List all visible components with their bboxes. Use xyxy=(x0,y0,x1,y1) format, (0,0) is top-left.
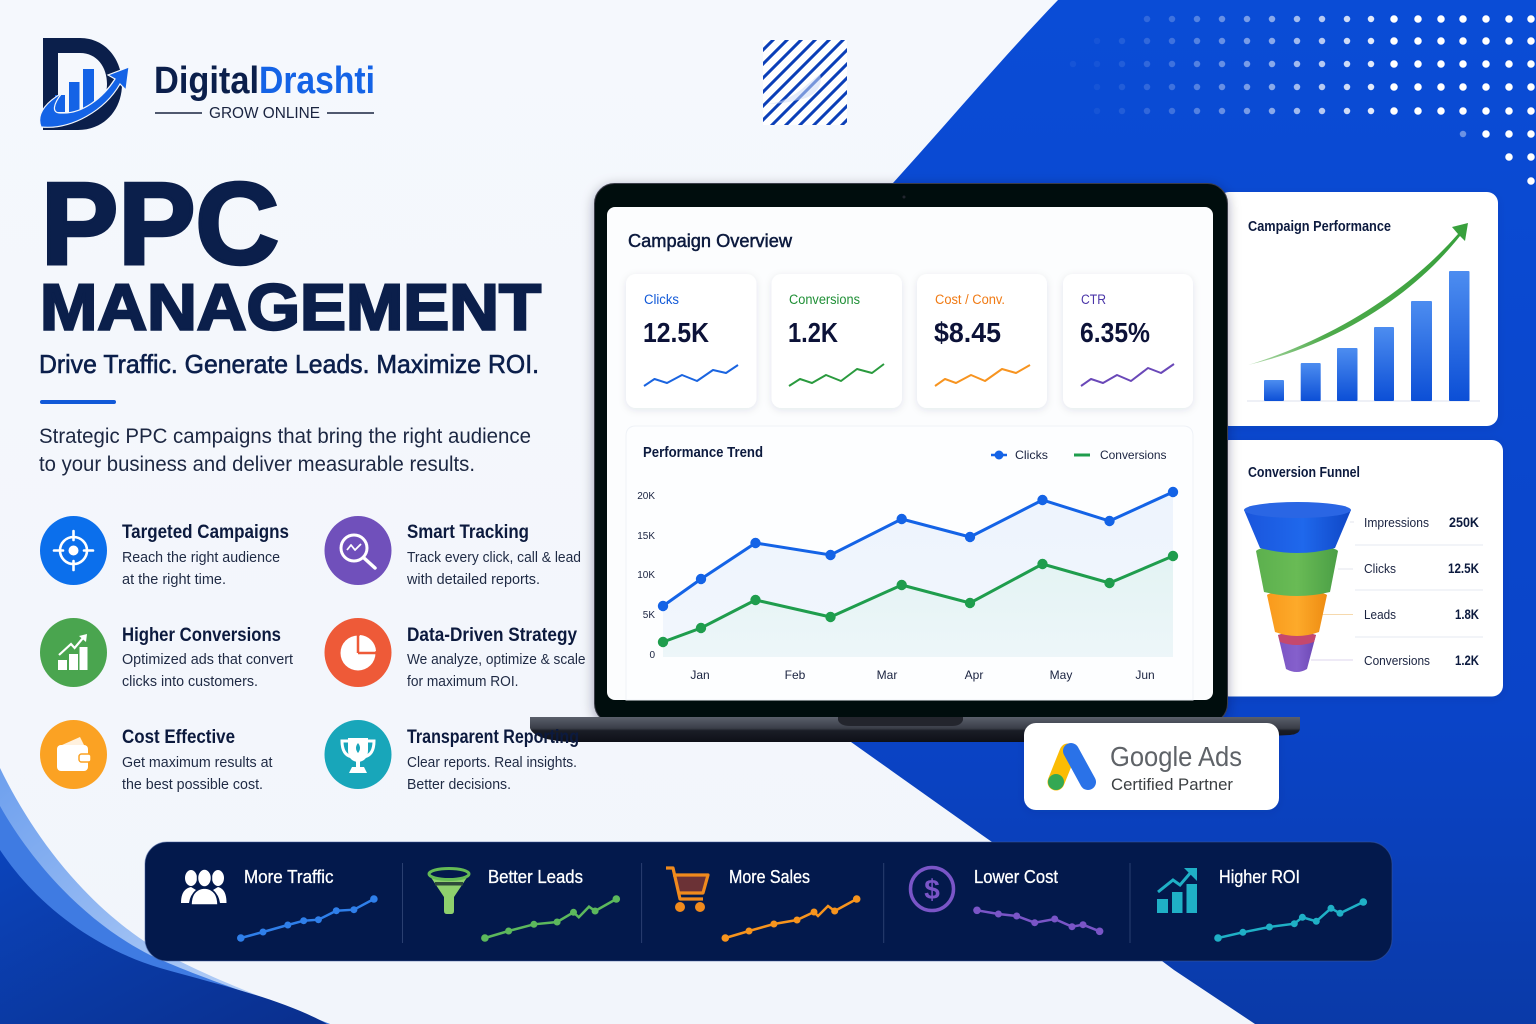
text block: Optimized ads that convert xyxy=(122,652,293,668)
text block xyxy=(122,727,272,793)
benefit: Higher ROI xyxy=(1157,867,1367,942)
feature: Cost Effective xyxy=(40,720,272,793)
KPI card: CTR xyxy=(1063,274,1193,408)
icon: people xyxy=(181,869,226,905)
benefit: Better Leads xyxy=(429,867,620,942)
text block: Transparent Reporting xyxy=(407,727,579,748)
sparkline xyxy=(722,895,860,942)
benefit: Lower Cost xyxy=(910,867,1103,935)
text block: We analyze, optimize & scale xyxy=(407,652,586,668)
funnel values: 250K xyxy=(1449,515,1479,530)
KPI card: Cost per Conversion xyxy=(917,274,1047,408)
growth arrow xyxy=(1248,223,1468,365)
logo mark xyxy=(40,38,129,130)
y axis labels: 5K xyxy=(643,610,655,621)
text block: Smart Tracking xyxy=(407,522,529,543)
text block: Higher Conversions xyxy=(122,625,281,646)
bar chart xyxy=(1247,271,1480,401)
benefit: More Sales: More Sales xyxy=(729,867,810,887)
text block xyxy=(407,727,579,793)
blue background shape right xyxy=(805,0,1536,1024)
icon: trophy xyxy=(324,720,392,789)
dot pattern top right xyxy=(1073,19,1531,181)
x axis labels: Jan xyxy=(690,668,710,682)
icon: wallet xyxy=(40,720,107,789)
feature: Targeted Campaigns xyxy=(40,516,289,588)
card title: Conversion Funnel xyxy=(1248,465,1360,481)
funnel values xyxy=(1448,515,1479,668)
badge: Google Ads Certified Partner: Certified Partner xyxy=(1111,775,1233,794)
bottom benefits bar xyxy=(145,842,1392,961)
tagline: Drive Traffic. Generate Leads. Maximize ROI. xyxy=(39,349,539,379)
text block: for maximum ROI. xyxy=(407,674,518,690)
text block: the best possible cost. xyxy=(122,777,263,793)
text block: with detailed reports. xyxy=(406,572,540,588)
line chart xyxy=(658,487,1178,657)
logo: DigitalDrashti: Drashti xyxy=(259,60,375,102)
intro paragraph xyxy=(39,425,531,476)
badge: Google Ads Certified Partner xyxy=(1024,723,1279,810)
icon: pie chart xyxy=(324,618,392,687)
icon: target xyxy=(40,516,107,585)
KPI card: Cost per Conversion: Cost / Conv. xyxy=(935,292,1005,307)
icon: cart xyxy=(666,868,708,912)
icon: dollar coin xyxy=(910,868,954,910)
KPI card: CTR: CTR xyxy=(1081,292,1106,307)
panel heading: Performance Trend xyxy=(643,445,763,461)
funnel values: 1.2K xyxy=(1455,653,1479,668)
icon: dollar coin: $ xyxy=(924,874,940,905)
feature: Smart Tracking xyxy=(324,516,581,588)
text block xyxy=(407,625,586,690)
funnel labels: Clicks xyxy=(1364,561,1396,576)
KPI card: CTR: 6.35% xyxy=(1080,317,1150,348)
logo: DigitalDrashti xyxy=(40,38,375,130)
KPI card: Conversions: Conversions xyxy=(789,292,860,307)
logo wordmark: Digital xyxy=(154,60,259,102)
y axis labels: 15K xyxy=(637,531,655,542)
icon: growth chart xyxy=(40,618,107,687)
text block: Clear reports. Real insights. xyxy=(407,755,577,771)
y axis labels: 0 xyxy=(649,650,655,661)
feature: Data-Driven Strategy xyxy=(324,618,586,690)
text block xyxy=(122,522,289,588)
laptop bezel xyxy=(594,184,1228,724)
icon: magnifier xyxy=(324,516,392,585)
benefit: More Traffic: More Traffic xyxy=(244,867,334,887)
side card: Campaign Performance xyxy=(1218,192,1498,426)
KPI card: Clicks: Clicks xyxy=(644,292,679,307)
intro paragraph: to your business and deliver measurable results. xyxy=(39,453,475,476)
benefit: Lower Cost: Lower Cost xyxy=(974,867,1058,887)
feature: Higher Conversions xyxy=(40,618,293,690)
text block: clicks into customers. xyxy=(122,674,258,690)
icon: funnel xyxy=(429,868,469,914)
chart legend: Clicks xyxy=(1015,448,1048,462)
x axis labels: Feb xyxy=(785,668,806,682)
benefit: More Sales xyxy=(666,867,860,942)
chart legend: Conversions xyxy=(1100,448,1166,462)
text block: Cost Effective xyxy=(122,727,235,748)
y axis labels: 20K xyxy=(637,491,655,502)
benefit: Better Leads: Better Leads xyxy=(488,867,583,887)
icon: Google Ads logo xyxy=(1048,751,1088,790)
x axis labels: Jun xyxy=(1135,668,1155,682)
benefit: More Traffic xyxy=(181,867,378,942)
x axis labels: May xyxy=(1050,668,1072,682)
y axis labels: 10K xyxy=(637,570,655,581)
side card: Conversion Funnel xyxy=(1218,440,1503,696)
funnel labels: Impressions xyxy=(1364,515,1429,530)
text block: at the right time. xyxy=(122,572,226,588)
text block xyxy=(406,522,581,588)
intro paragraph: Strategic PPC campaigns that bring the right audience xyxy=(39,425,531,448)
x axis labels xyxy=(690,668,1155,682)
text block: Track every click, call & lead xyxy=(407,550,581,566)
y axis labels xyxy=(637,491,655,661)
funnel values: 1.8K xyxy=(1455,607,1479,622)
funnel graphic xyxy=(1244,502,1351,672)
title: PPC: PPC xyxy=(41,158,279,288)
benefit: Higher ROI: Higher ROI xyxy=(1219,867,1300,887)
card title: Campaign Performance xyxy=(1248,219,1391,235)
x axis labels: Apr xyxy=(965,668,983,682)
text block xyxy=(122,625,293,690)
feature: Transparent Reporting xyxy=(324,720,579,793)
sparkline xyxy=(237,895,378,942)
laptop xyxy=(530,184,1300,742)
KPI card: Clicks xyxy=(626,274,756,408)
laptop base xyxy=(530,717,1300,742)
dashboard heading: Campaign Overview xyxy=(628,230,793,251)
logo tagline: GROW ONLINE xyxy=(209,105,320,122)
text block: Get maximum results at xyxy=(122,755,272,771)
KPI card: Cost per Conversion: $8.45 xyxy=(934,317,1001,348)
hatched square decoration xyxy=(763,40,847,125)
chart legend xyxy=(991,448,1166,462)
laptop camera xyxy=(902,196,906,198)
text block: Data-Driven Strategy xyxy=(407,625,577,646)
performance trend panel xyxy=(626,426,1193,700)
text block: Better decisions. xyxy=(407,777,511,793)
sparkline xyxy=(1214,898,1367,942)
badge text: Google Ads xyxy=(1110,741,1242,772)
funnel labels: Conversions xyxy=(1364,653,1430,668)
funnel connectors and dividers xyxy=(1311,522,1483,660)
sparkline xyxy=(481,895,620,942)
bottom left wave shape xyxy=(0,768,330,1024)
laptop screen xyxy=(607,207,1213,700)
KPI card: Clicks: 12.5K xyxy=(643,317,709,348)
x axis labels: Mar xyxy=(877,668,897,682)
title: MANAGEMENT: MANAGEMENT xyxy=(40,270,541,344)
KPI card: Conversions: 1.2K xyxy=(788,317,838,348)
sparkline xyxy=(973,906,1103,935)
icon: growth bars xyxy=(1157,868,1197,913)
text block: Targeted Campaigns xyxy=(122,522,289,543)
funnel labels: Leads xyxy=(1364,607,1396,622)
funnel values: 12.5K xyxy=(1448,561,1479,576)
text block: Reach the right audience xyxy=(122,550,280,566)
accent underline xyxy=(40,400,116,404)
KPI card: Conversions xyxy=(772,274,902,408)
funnel labels xyxy=(1364,515,1430,668)
